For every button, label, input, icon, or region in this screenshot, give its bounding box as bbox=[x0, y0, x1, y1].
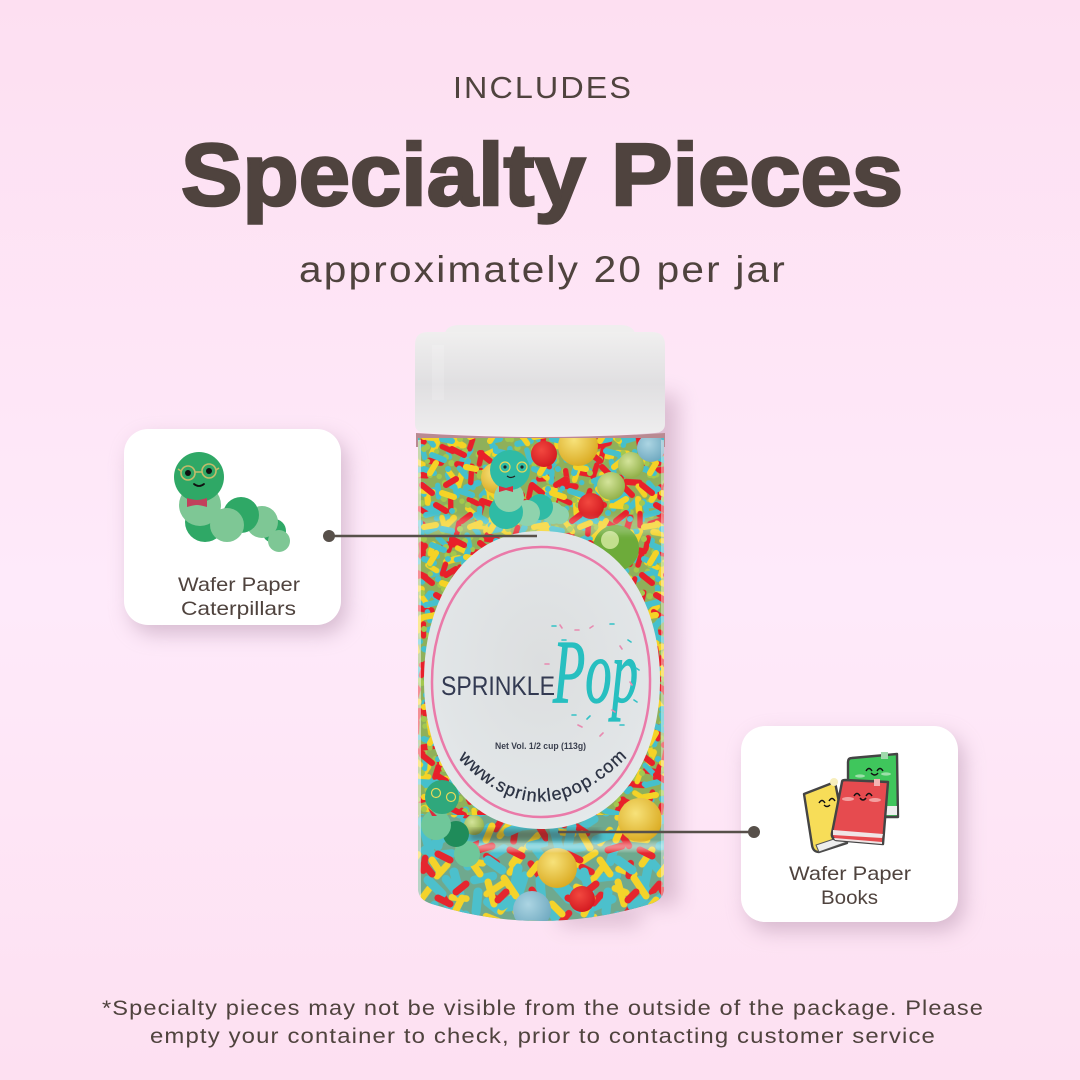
jar caterpillar bottom bbox=[421, 780, 480, 867]
card: wafer paper caterpillars bbox=[124, 429, 347, 634]
jar body with sprinkles bbox=[416, 426, 666, 940]
title: Specialty Pieces bbox=[181, 125, 903, 224]
yellow book bbox=[804, 778, 847, 852]
jar label: www.sprinklepop.com bbox=[460, 751, 626, 802]
card label bbox=[789, 863, 912, 909]
net volume text: Net Vol. 1/2 cup (113g) bbox=[495, 741, 586, 751]
label pink ring bbox=[432, 547, 650, 817]
jar shadow bbox=[560, 395, 678, 925]
green book bbox=[848, 752, 898, 817]
card label: Wafer Paper bbox=[789, 863, 912, 885]
card: wafer paper books bbox=[741, 726, 964, 931]
logo word sprinkle: SPRINKLE bbox=[441, 671, 555, 701]
card label: Books bbox=[821, 887, 878, 909]
card label: Wafer Paper bbox=[178, 574, 301, 596]
jar caterpillar top bbox=[489, 450, 569, 529]
footnote: empty your container to check, prior to contacting customer service bbox=[150, 1025, 936, 1048]
arrow: connector to books bbox=[558, 826, 760, 838]
large candy balls bbox=[464, 438, 664, 921]
red book bbox=[832, 779, 888, 844]
jar cap bbox=[415, 325, 665, 436]
icon: caterpillar bbox=[174, 452, 290, 552]
subtitle: approximately 20 per jar bbox=[299, 249, 787, 290]
card label: Caterpillars bbox=[181, 598, 296, 620]
heading: includes: INCLUDES bbox=[453, 70, 633, 105]
card label bbox=[178, 574, 301, 620]
jar bbox=[415, 325, 686, 933]
logo word pop: Pop bbox=[552, 623, 638, 722]
icon: books bbox=[804, 752, 898, 852]
footnote bbox=[102, 997, 984, 1048]
jar rim bbox=[416, 433, 665, 447]
jar glare bands bbox=[418, 518, 664, 534]
logo confetti bbox=[545, 624, 639, 736]
footnote: *Specialty pieces may not be visible from the outside of the package. Please bbox=[102, 997, 984, 1020]
jar label bbox=[424, 531, 660, 829]
website arc text bbox=[458, 752, 632, 802]
arrow: connector to caterpillars bbox=[323, 530, 537, 542]
